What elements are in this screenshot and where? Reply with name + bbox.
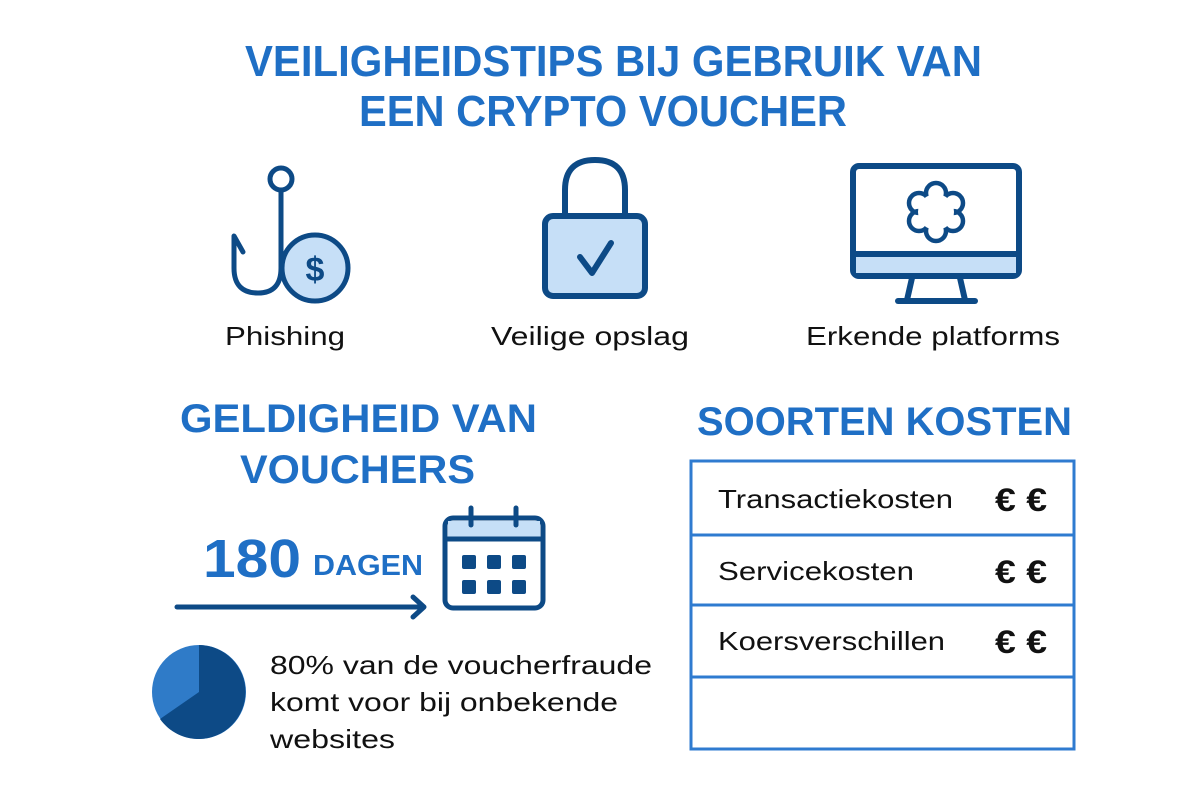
icon: calendar xyxy=(445,508,543,608)
text: fraude stat: 80% van de voucherfraude xyxy=(270,650,652,680)
icon: lock xyxy=(545,160,645,296)
text: fraude stat xyxy=(269,650,652,754)
text: fraude stat: websites xyxy=(269,724,395,754)
stat: 180 dagen: DAGEN xyxy=(313,550,423,582)
pie chart xyxy=(152,645,246,739)
table: kosten: Transactiekosten xyxy=(718,484,953,514)
table: kosten: € € xyxy=(995,482,1047,518)
heading: geldigheid: GELDIGHEID VAN xyxy=(180,397,537,441)
heading: soorten kosten: SOORTEN KOSTEN xyxy=(697,400,1072,444)
title: VEILIGHEIDSTIPS BIJ GEBRUIK VAN xyxy=(245,37,982,86)
table: kosten: Koersverschillen xyxy=(718,626,945,656)
label: erkende platforms: Erkende platforms xyxy=(806,321,1060,351)
icon: phishing hook: $ xyxy=(306,251,325,289)
text: fraude stat: komt voor bij onbekende xyxy=(270,687,618,717)
title: EEN CRYPTO VOUCHER xyxy=(359,87,847,136)
label: phishing: Phishing xyxy=(225,321,345,351)
arrow xyxy=(177,597,424,617)
heading: geldigheid xyxy=(180,397,537,492)
stat: 180 dagen xyxy=(203,529,423,589)
icon: monitor xyxy=(853,166,1019,301)
stat: 180 dagen: 180 xyxy=(203,529,301,589)
table: kosten xyxy=(691,461,1074,749)
table: kosten: € € xyxy=(995,554,1047,590)
icon: phishing hook xyxy=(234,168,348,301)
table: kosten: € € xyxy=(995,624,1047,660)
heading: geldigheid: VOUCHERS xyxy=(240,448,475,492)
table: kosten: Servicekosten xyxy=(718,556,914,586)
title xyxy=(245,37,982,136)
label: veilige opslag: Veilige opslag xyxy=(491,321,689,351)
